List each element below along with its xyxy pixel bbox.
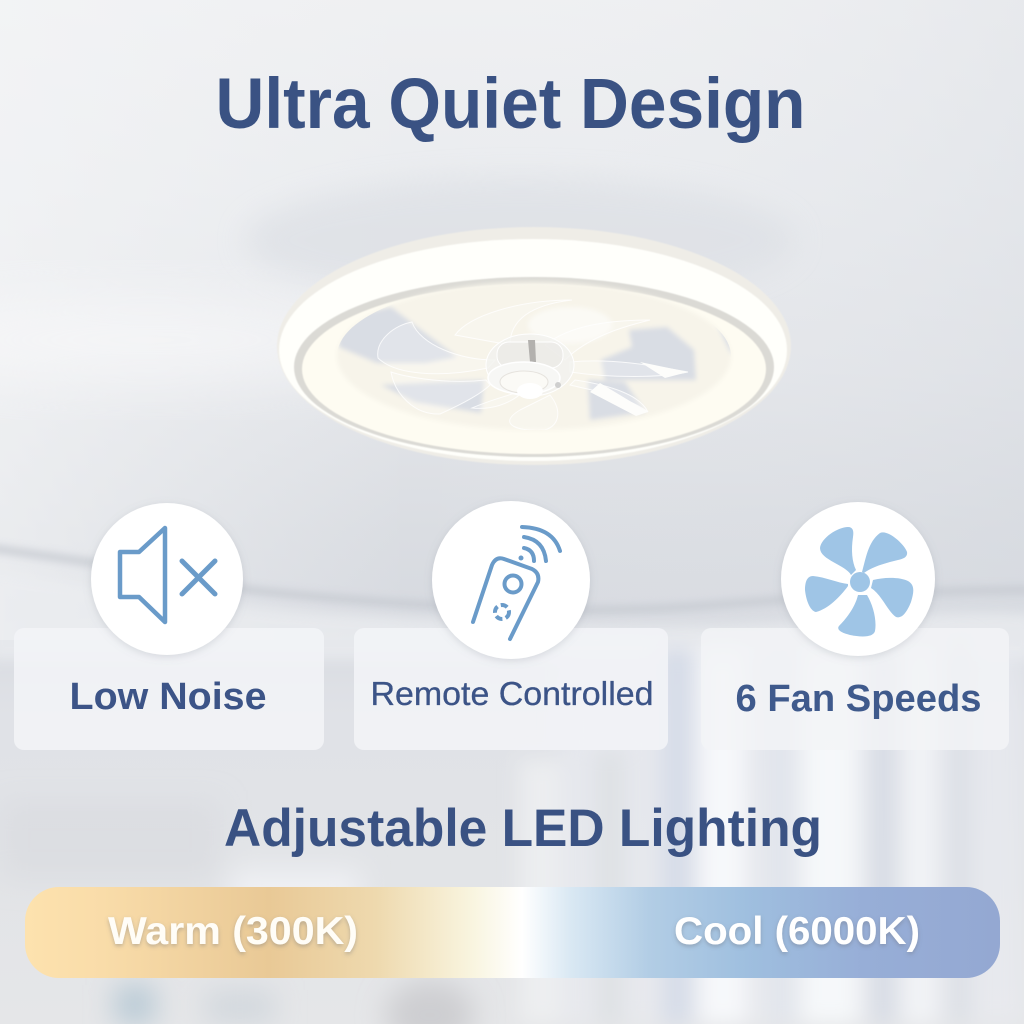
glowing outer ring: [279, 239, 787, 461]
ceiling fan light: [277, 227, 791, 465]
label: warm: Warm (300K): [108, 910, 358, 953]
fan opening: [337, 282, 731, 430]
icon: remote control: [432, 501, 590, 659]
heading: Adjustable LED Lighting: Adjustable LED Lighting: [224, 799, 822, 858]
card: Remote Controlled: [354, 628, 668, 750]
outer ring body: [277, 227, 791, 465]
window and curtains: [520, 640, 1024, 1024]
grey patches seen through the fan opening: [338, 307, 732, 420]
label: 6 Fan Speeds: 6 Fan Speeds: [736, 678, 982, 720]
furniture: [0, 800, 475, 1024]
title: Ultra Quiet Design: [216, 65, 806, 144]
card: Low Noise: [14, 628, 324, 750]
icon: fan: [781, 502, 935, 656]
card: 6 Fan Speeds: [701, 628, 1009, 750]
clear blades: [378, 300, 688, 430]
groove: [294, 277, 774, 457]
icon: muted speaker: [91, 503, 243, 655]
label: Low Noise: Low Noise: [70, 676, 266, 718]
motor hub: [486, 334, 574, 396]
inner glow ring: [302, 284, 766, 454]
label: cool: Cool (6000K): [674, 910, 920, 953]
color temperature bar: [25, 887, 1000, 978]
label: Remote Controlled: Remote Controlled: [370, 675, 654, 712]
central canopy highlight: [530, 308, 609, 340]
